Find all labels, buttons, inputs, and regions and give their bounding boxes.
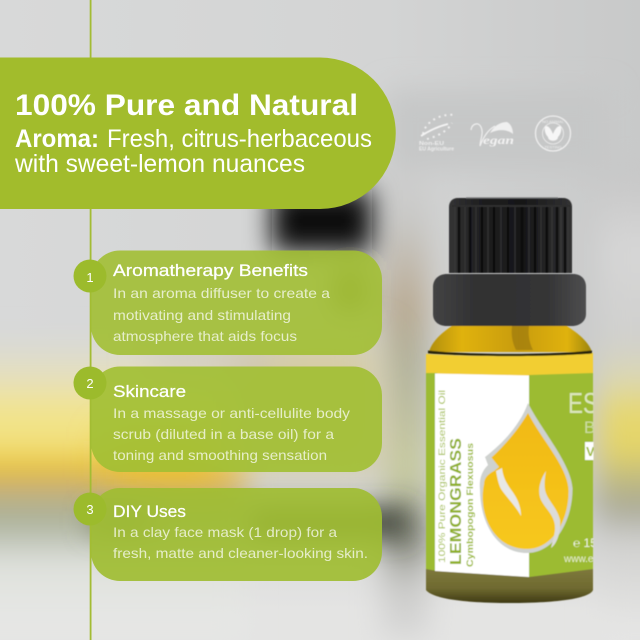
title: 100% Pure and Natural <box>15 89 358 122</box>
certification icons <box>419 115 570 152</box>
card 1 body <box>113 285 330 344</box>
card 1 body: atmosphere that aids focus <box>113 328 297 344</box>
header banner <box>0 58 396 209</box>
label green right panel <box>529 373 593 577</box>
icon: no animal testing <box>536 116 570 151</box>
bottle neck <box>429 322 592 352</box>
number badge 1 <box>74 260 106 292</box>
number badge 2: 2 <box>86 376 94 391</box>
dropper collar <box>433 274 586 326</box>
benefit card 2: skincare <box>74 366 382 472</box>
product bottle <box>426 198 603 603</box>
yellow shoulder band <box>426 353 593 376</box>
card 2 panel <box>91 366 382 472</box>
card 3 body <box>113 524 368 561</box>
card 3 heading: DIY Uses <box>113 502 186 521</box>
number badge 1: 1 <box>86 270 94 285</box>
number badge 2 <box>74 366 106 400</box>
white tag: V <box>586 444 595 459</box>
icon: no animal testing: TESTING <box>544 144 562 150</box>
label text: organic oil: 100% Pure Organic Essential Oil <box>437 390 448 563</box>
vertical timeline line <box>90 0 92 640</box>
number badge 3 <box>74 492 106 526</box>
bottle base <box>426 566 593 603</box>
neck highlight <box>512 326 533 350</box>
banner shape <box>0 58 396 209</box>
volume text: ℮ 15 <box>573 536 597 550</box>
card 1 panel <box>91 250 382 355</box>
card 2 heading: Skincare <box>113 382 186 401</box>
icon: EU organic leaf: Non-EU <box>419 141 444 147</box>
website text: www.ess <box>563 554 603 565</box>
aroma line two: with sweet-lemon nuances <box>14 150 305 178</box>
icon: no animal testing: NO ANIMAL <box>542 119 565 124</box>
aroma line one: Aroma: <box>15 125 99 153</box>
card 3 body: fresh, matte and cleaner-looking skin. <box>113 545 368 561</box>
card 3 panel <box>91 488 382 581</box>
benefit card 3: DIY uses <box>74 488 382 581</box>
icon: vegan mark: egan <box>483 133 514 147</box>
card 2 body: toning and smoothing sensation <box>113 447 327 463</box>
card 1 body: motivating and stimulating <box>113 307 291 323</box>
shoulder dark line <box>428 350 592 356</box>
card 1 heading: Aromatherapy Benefits <box>113 261 308 280</box>
label green left strip <box>426 373 437 571</box>
label white panel <box>435 374 529 577</box>
dropper cap <box>449 198 572 273</box>
card 3 body: In a clay face mask (1 drop) for a <box>113 524 337 540</box>
drop graphic <box>480 403 573 553</box>
label text: latin name: Cymbopogon Flexuosus <box>465 443 476 567</box>
label text: lemongrass: LEMONGRASS <box>448 438 465 565</box>
icon: EU organic leaf <box>419 115 456 152</box>
card 1 body: In an aroma diffuser to create a <box>113 285 330 301</box>
brand second line: B <box>584 418 595 437</box>
brand text: ES <box>568 388 598 420</box>
icon: vegan mark <box>471 122 514 147</box>
benefit card 1: aromatherapy <box>74 250 382 355</box>
number badge 3: 3 <box>86 502 94 517</box>
icon: EU organic leaf: EU Agriculture <box>419 146 454 152</box>
card 2 body: scrub (diluted in a base oil) for a <box>113 426 334 442</box>
card 2 body <box>113 405 350 463</box>
aroma line one: Fresh, citrus-herbaceous <box>107 125 372 153</box>
card 2 body: In a massage or anti-cellulite body <box>113 405 350 421</box>
